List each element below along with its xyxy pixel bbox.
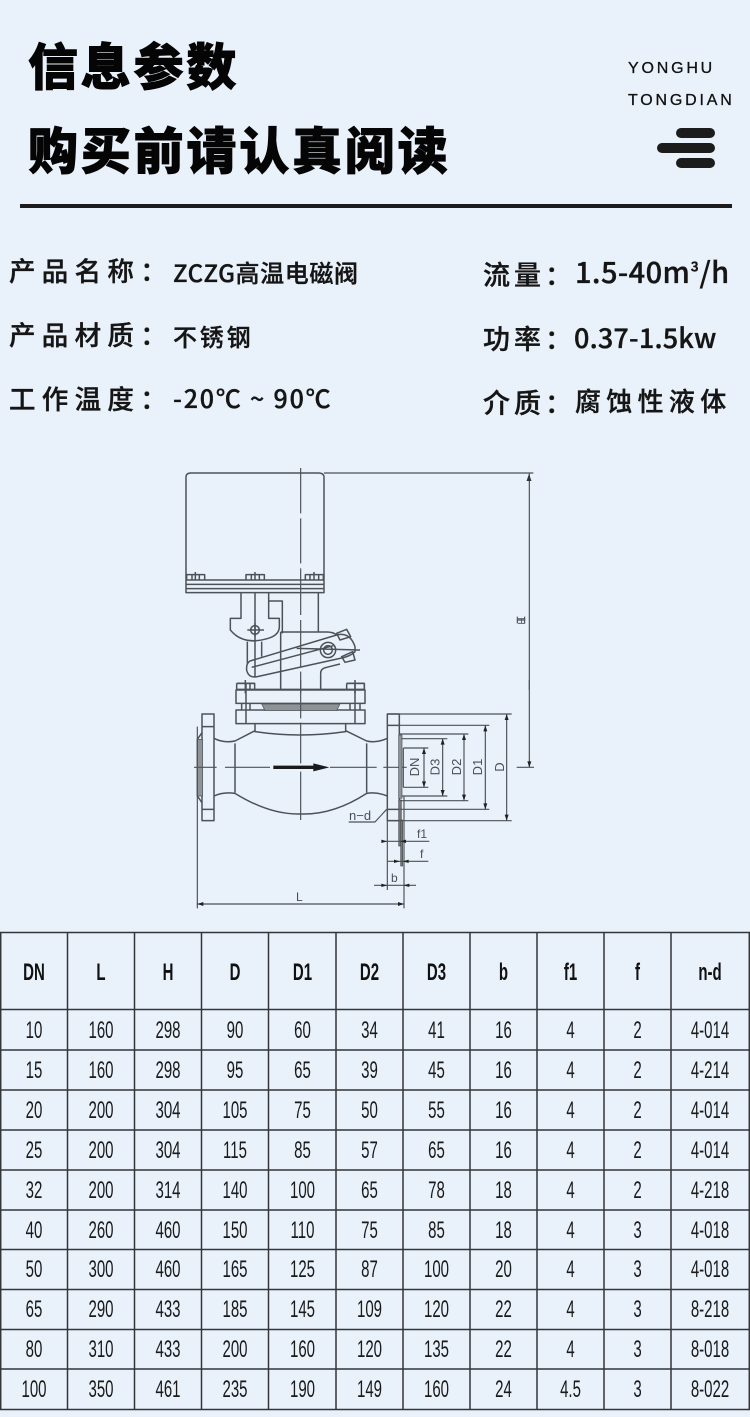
table header row: b bbox=[499, 960, 508, 986]
table data rows: 20 bbox=[26, 1098, 42, 1124]
drawing labels: D bbox=[492, 762, 507, 772]
table data rows: 120 bbox=[357, 1337, 382, 1363]
table data rows: 200 bbox=[88, 1138, 114, 1164]
brand name bbox=[628, 60, 735, 109]
table data rows: 4 bbox=[566, 1337, 575, 1363]
table data rows: 16 bbox=[495, 1138, 512, 1164]
table data rows: 16 bbox=[495, 1018, 512, 1044]
table header row: n-d bbox=[698, 960, 722, 986]
table data rows: 105 bbox=[222, 1098, 248, 1124]
table data rows: 10 bbox=[26, 1018, 42, 1044]
drawing labels: D1 bbox=[470, 759, 485, 775]
spec: power: 功率： bbox=[483, 318, 576, 357]
table data rows: 75 bbox=[294, 1098, 311, 1124]
title line 2: 购买前请认真阅读 bbox=[28, 124, 450, 180]
table data rows: 75 bbox=[361, 1218, 378, 1244]
title line 1: 信息参数 bbox=[28, 40, 239, 96]
table data rows: 190 bbox=[290, 1377, 315, 1403]
spec: product name: 产品名称： bbox=[9, 250, 173, 289]
table data rows: 60 bbox=[294, 1018, 311, 1044]
table data rows: 350 bbox=[88, 1377, 114, 1403]
table header row: L bbox=[96, 960, 106, 986]
table data rows: 22 bbox=[495, 1297, 512, 1323]
table data rows: 87 bbox=[361, 1257, 378, 1283]
table data rows: 304 bbox=[155, 1138, 181, 1164]
table data rows: 120 bbox=[424, 1297, 449, 1323]
drawing labels: DN bbox=[407, 758, 422, 776]
table data rows: 300 bbox=[88, 1257, 114, 1283]
table data rows: 433 bbox=[155, 1337, 181, 1363]
brand name: YONGHU bbox=[628, 60, 715, 77]
table data rows: 57 bbox=[361, 1138, 378, 1164]
table header row: DN bbox=[23, 960, 45, 986]
table data rows: 109 bbox=[357, 1297, 382, 1323]
table data rows: 8-018 bbox=[691, 1337, 729, 1363]
table data rows: 3 bbox=[633, 1337, 642, 1363]
table data rows: 4 bbox=[566, 1218, 575, 1244]
dimension arrow heads bbox=[197, 714, 531, 906]
arrow head H bbox=[526, 474, 532, 481]
table data rows: 4-214 bbox=[691, 1058, 729, 1084]
table data rows: 235 bbox=[222, 1377, 248, 1403]
table header row: f1 bbox=[564, 960, 577, 986]
flow arrow bbox=[273, 763, 329, 771]
drawing labels: H bbox=[517, 617, 528, 625]
text: 0.37-1.5kw bbox=[574, 317, 717, 356]
table data rows: 3 bbox=[633, 1297, 642, 1323]
spec: material: 产品材质： bbox=[9, 314, 173, 353]
table data rows: 85 bbox=[428, 1218, 445, 1244]
valve dimension drawing bbox=[186, 468, 534, 908]
table header row: D bbox=[230, 960, 240, 986]
table data rows: 45 bbox=[428, 1058, 445, 1084]
drawing labels: D2 bbox=[449, 759, 464, 775]
table data rows: 22 bbox=[495, 1337, 512, 1363]
table data rows: 461 bbox=[155, 1377, 181, 1403]
table data rows: 4-018 bbox=[691, 1257, 729, 1283]
table data rows: 4-018 bbox=[691, 1218, 729, 1244]
header rule bbox=[20, 204, 732, 208]
table data rows: 3 bbox=[633, 1377, 642, 1403]
table data rows: 24 bbox=[495, 1377, 512, 1403]
table data rows: 100 bbox=[21, 1377, 47, 1403]
table data rows: 4-218 bbox=[691, 1178, 729, 1204]
table data rows: 460 bbox=[155, 1218, 181, 1244]
table data rows: 90 bbox=[227, 1018, 243, 1044]
table data rows: 298 bbox=[155, 1018, 181, 1044]
table data rows: 4-014 bbox=[691, 1018, 729, 1044]
table data rows: 160 bbox=[88, 1058, 114, 1084]
table data rows: 125 bbox=[290, 1257, 315, 1283]
table header row: f bbox=[635, 960, 640, 986]
text: 1.5-40m³/h bbox=[575, 250, 730, 292]
table data rows: 165 bbox=[222, 1257, 248, 1283]
table data rows: 20 bbox=[495, 1257, 512, 1283]
table data rows: 135 bbox=[424, 1337, 449, 1363]
drawing labels: f bbox=[420, 847, 424, 861]
table data rows: 85 bbox=[294, 1138, 311, 1164]
table data rows: 298 bbox=[155, 1058, 181, 1084]
drawing labels: b bbox=[391, 871, 398, 885]
drawing labels: D3 bbox=[428, 759, 442, 775]
table data rows: 100 bbox=[290, 1178, 315, 1204]
drawing labels: L bbox=[296, 890, 303, 904]
table data rows: 200 bbox=[222, 1337, 248, 1363]
table data rows: 8-218 bbox=[691, 1297, 729, 1323]
table data rows: 4 bbox=[566, 1098, 575, 1124]
table data rows: 16 bbox=[495, 1098, 512, 1124]
table data rows: 41 bbox=[428, 1018, 445, 1044]
table data rows: 100 bbox=[424, 1257, 449, 1283]
table data rows: 15 bbox=[26, 1058, 42, 1084]
table data rows: 160 bbox=[290, 1337, 315, 1363]
text: -20℃ ~ 90℃ bbox=[173, 380, 332, 416]
table data rows: 95 bbox=[227, 1058, 243, 1084]
spec: medium bbox=[483, 382, 732, 421]
spec: material bbox=[9, 314, 253, 353]
table header row: D3 bbox=[427, 960, 446, 986]
drawing labels: n−d bbox=[349, 808, 371, 823]
table data rows: 18 bbox=[495, 1178, 512, 1204]
table data rows: 8-022 bbox=[691, 1377, 729, 1403]
table data rows: 65 bbox=[361, 1178, 378, 1204]
table header row: D1 bbox=[293, 960, 312, 986]
table data rows: 3 bbox=[633, 1218, 642, 1244]
table data rows: 55 bbox=[428, 1098, 445, 1124]
table data rows: 314 bbox=[155, 1178, 181, 1204]
text: ZCZG高温电磁阀 bbox=[173, 254, 359, 289]
actuator and bracket bbox=[186, 468, 533, 693]
table data rows: 433 bbox=[155, 1297, 181, 1323]
drawing labels: f1 bbox=[417, 827, 427, 841]
table header row: H bbox=[163, 960, 173, 986]
table data rows: 150 bbox=[222, 1218, 248, 1244]
table data rows: 4 bbox=[566, 1018, 575, 1044]
parameter table bbox=[0, 932, 750, 1410]
table data rows: 2 bbox=[633, 1098, 642, 1124]
table data rows: 304 bbox=[155, 1098, 181, 1124]
table data rows: 160 bbox=[88, 1018, 114, 1044]
text: 腐蚀性液体 bbox=[575, 382, 732, 419]
brand name: TONGDIAN bbox=[628, 92, 735, 109]
table data rows: 4.5 bbox=[560, 1377, 581, 1403]
table data rows: 18 bbox=[495, 1218, 512, 1244]
table data rows: 260 bbox=[88, 1218, 114, 1244]
text: 不锈钢 bbox=[173, 318, 253, 353]
table data rows: 140 bbox=[222, 1178, 248, 1204]
table data rows: 2 bbox=[633, 1178, 642, 1204]
table data rows: 160 bbox=[424, 1377, 449, 1403]
table data rows: 4 bbox=[566, 1257, 575, 1283]
table data rows: 200 bbox=[88, 1178, 114, 1204]
table grid bbox=[0, 932, 750, 1410]
table data rows: 3 bbox=[633, 1257, 642, 1283]
table data rows: 65 bbox=[428, 1138, 445, 1164]
table data rows: 2 bbox=[633, 1138, 642, 1164]
table data rows: 115 bbox=[223, 1138, 247, 1164]
table data rows: 2 bbox=[633, 1058, 642, 1084]
spec: power bbox=[483, 317, 717, 357]
table data rows: 39 bbox=[361, 1058, 378, 1084]
drawing labels bbox=[296, 617, 528, 904]
spec: flow bbox=[483, 250, 730, 293]
table data rows: 65 bbox=[26, 1297, 42, 1323]
table data rows: 4 bbox=[566, 1058, 575, 1084]
table data rows bbox=[21, 1018, 729, 1403]
table data rows: 185 bbox=[222, 1297, 248, 1323]
table data rows: 4-014 bbox=[691, 1138, 729, 1164]
table data rows: 200 bbox=[88, 1098, 114, 1124]
spec: flow: 流量： bbox=[483, 254, 576, 293]
table data rows: 65 bbox=[294, 1058, 311, 1084]
table data rows: 4 bbox=[566, 1297, 575, 1323]
spec: working temperature: 工作温度： bbox=[9, 378, 173, 417]
table data rows: 149 bbox=[357, 1377, 382, 1403]
table data rows: 290 bbox=[88, 1297, 114, 1323]
spec: product name bbox=[9, 250, 359, 289]
table data rows: 2 bbox=[633, 1018, 642, 1044]
table data rows: 145 bbox=[290, 1297, 315, 1323]
table data rows: 40 bbox=[26, 1218, 42, 1244]
table data rows: 110 bbox=[291, 1218, 314, 1244]
table header row bbox=[23, 960, 722, 986]
table data rows: 50 bbox=[26, 1257, 42, 1283]
table data rows: 310 bbox=[88, 1337, 114, 1363]
table data rows: 78 bbox=[428, 1178, 445, 1204]
spec: medium: 介质： bbox=[483, 382, 576, 421]
table data rows: 16 bbox=[495, 1058, 512, 1084]
table data rows: 34 bbox=[361, 1018, 378, 1044]
table data rows: 50 bbox=[361, 1098, 378, 1124]
table data rows: 32 bbox=[26, 1178, 42, 1204]
table data rows: 460 bbox=[155, 1257, 181, 1283]
table data rows: 4 bbox=[566, 1138, 575, 1164]
icon: brand menu bars bbox=[657, 128, 715, 168]
table data rows: 80 bbox=[26, 1337, 42, 1363]
table data rows: 4 bbox=[566, 1178, 575, 1204]
table data rows: 4-014 bbox=[691, 1098, 729, 1124]
table data rows: 25 bbox=[26, 1138, 42, 1164]
table header row: D2 bbox=[360, 960, 379, 986]
valve body and flanges bbox=[194, 680, 534, 908]
spec: working temperature bbox=[9, 378, 332, 417]
